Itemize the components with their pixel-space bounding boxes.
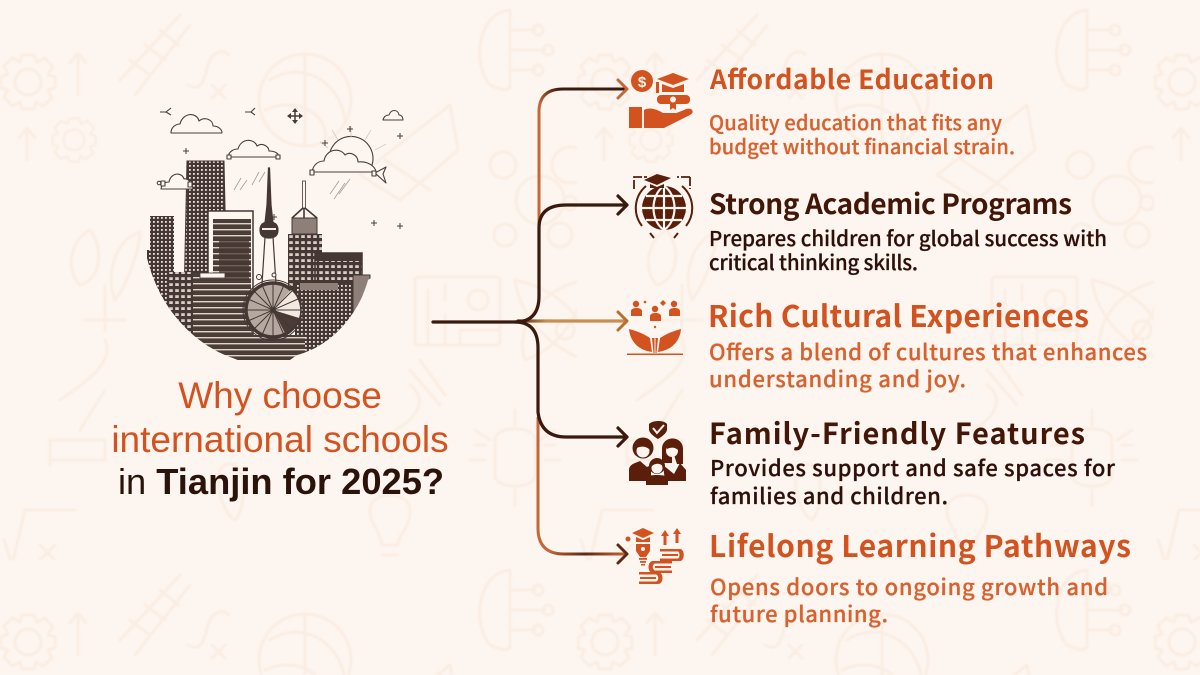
heading: Lifelong Learning Pathways	[709, 522, 1131, 566]
description	[709, 335, 1147, 394]
description: budget without financial strain.	[709, 131, 1015, 160]
title: international schools	[111, 419, 449, 460]
arrow to Rich Cultural Experiences	[518, 312, 627, 330]
title	[111, 375, 449, 502]
description	[709, 222, 1107, 276]
illustration: Tianjin skyline in a half-circle	[147, 108, 403, 363]
heading: Affordable Education	[709, 58, 994, 97]
icon: money, graduation cap and hand	[629, 70, 693, 128]
icon: money, graduation cap and hand: $	[638, 74, 647, 91]
heading: Family-Friendly Features	[709, 411, 1085, 453]
item: Lifelong Learning Pathways	[626, 522, 1131, 629]
heading: Strong Academic Programs	[709, 183, 1072, 223]
description: future planning.	[710, 597, 888, 629]
sparkle marks	[157, 108, 403, 229]
tower	[260, 168, 278, 284]
item: Strong Academic Programs	[634, 174, 1107, 276]
arrow to Strong Academic Programs	[433, 196, 627, 322]
item: Family-Friendly Features	[629, 411, 1116, 511]
description	[709, 107, 1015, 160]
description	[710, 451, 1116, 511]
description: understanding and joy.	[709, 362, 966, 394]
description: Opens doors to ongoing growth and	[710, 570, 1108, 602]
description: Provides support and safe spaces for	[710, 451, 1116, 483]
icon: cap, bulb, arrows and stacked books	[626, 528, 684, 584]
connector arrows	[433, 80, 627, 563]
clouds and sun	[160, 108, 403, 199]
arrow to Lifelong Learning Pathways	[538, 418, 627, 563]
item: Affordable Education	[629, 58, 1015, 160]
description: families and children.	[710, 479, 948, 511]
arrow to Family-Friendly Features	[515, 322, 627, 446]
description: Prepares children for global success with	[709, 222, 1107, 252]
description	[710, 570, 1108, 629]
icon: globe with graduation cap	[634, 174, 692, 238]
skyline buildings	[147, 161, 370, 363]
arrow to Affordable Education	[539, 80, 627, 225]
description: Quality education that fits any	[709, 107, 1002, 136]
icon: family with a shield	[629, 421, 686, 485]
description: critical thinking skills.	[709, 246, 918, 276]
description: Offers a blend of cultures that enhances	[709, 335, 1147, 367]
title: in Tianjin for 2025?	[118, 461, 444, 502]
ferris wheel	[243, 273, 303, 340]
title: Why choose	[178, 375, 382, 416]
icon: people over a globe bowl	[627, 300, 683, 355]
item: Rich Cultural Experiences	[627, 292, 1147, 394]
heading: Rich Cultural Experiences	[708, 292, 1089, 336]
